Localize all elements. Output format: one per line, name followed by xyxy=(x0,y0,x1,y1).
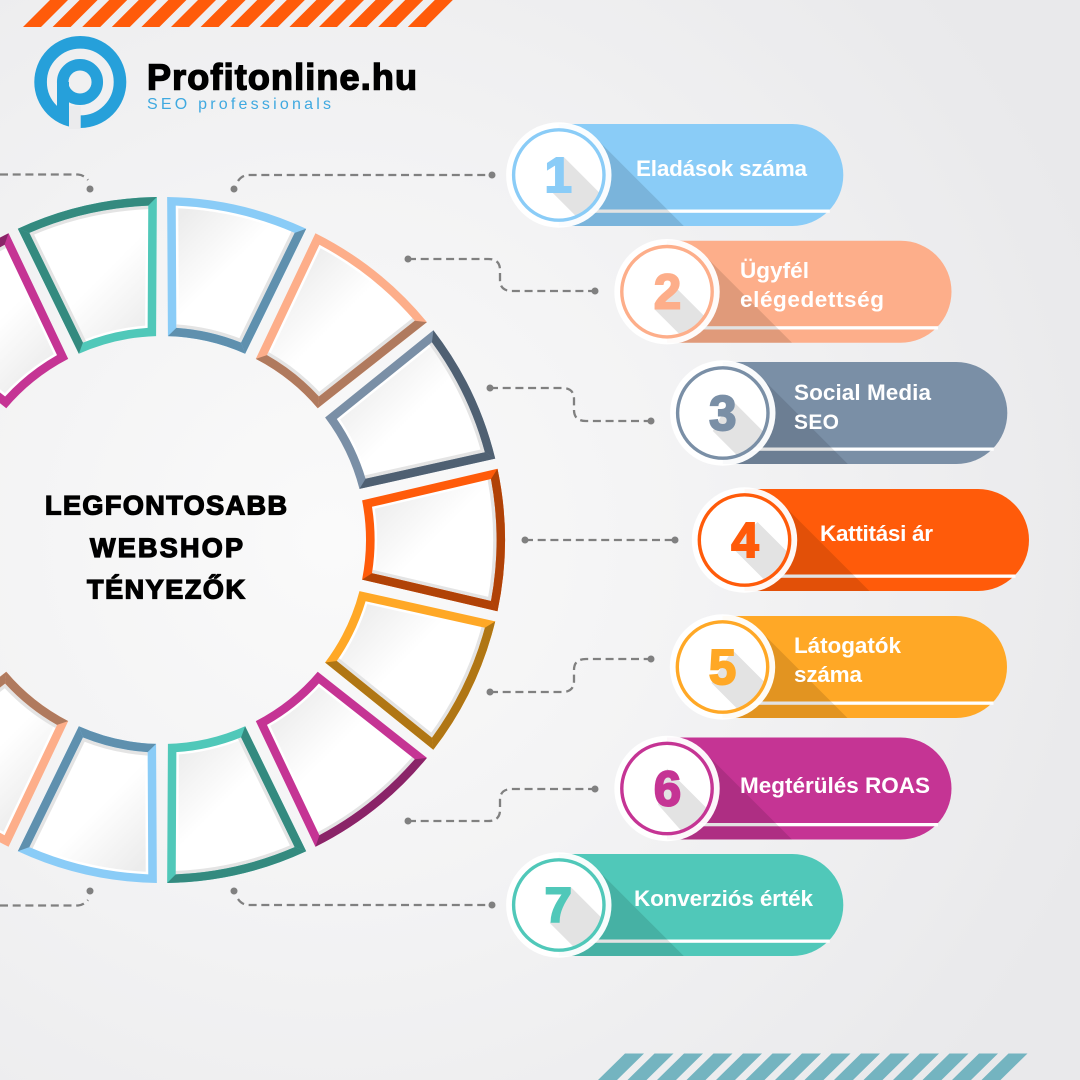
segment 1 blue xyxy=(137,190,308,361)
segmented ring xyxy=(0,190,505,890)
item 2 pill: Ügyfél xyxy=(740,258,809,283)
item 6 pill: Megtérülés ROAS xyxy=(740,773,930,798)
segment 2 peach xyxy=(231,227,432,428)
icon: Profitonline P mark xyxy=(41,42,120,129)
item 4 pill: 4 xyxy=(731,514,759,568)
connector: item 3 xyxy=(486,384,654,424)
segment 5 amber xyxy=(311,563,502,753)
item 6 pill xyxy=(614,736,952,841)
item 3 pill: 3 xyxy=(709,387,736,441)
logo tagline: SEO professionals xyxy=(147,96,331,113)
item 1 pill: 1 xyxy=(545,149,572,203)
connector: item 4 xyxy=(522,536,678,544)
item 4 pill xyxy=(692,488,1029,592)
ring left half xyxy=(0,190,187,890)
segment 3 slate xyxy=(311,327,502,517)
logo wordmark: Profitonline.hu xyxy=(147,56,417,98)
item 3 pill: SEO xyxy=(794,411,839,434)
item 7 pill: Konverziós érték xyxy=(634,886,813,911)
ring right half xyxy=(137,190,505,890)
connector: item 6 xyxy=(404,786,598,824)
connector: item 7 xyxy=(230,888,496,908)
item 5 pill xyxy=(670,614,1007,720)
connector: item 1 xyxy=(230,172,496,192)
title: LEGFONTOSABB xyxy=(45,490,287,520)
connector: bottom left xyxy=(0,888,94,906)
item 2 pill: elégedettség xyxy=(740,287,884,312)
logo xyxy=(41,42,417,129)
bottom teal stripes xyxy=(598,1054,1028,1080)
top orange stripes xyxy=(23,0,453,27)
item 1 pill: Eladások száma xyxy=(636,156,807,181)
title: TÉNYEZŐK xyxy=(87,574,246,604)
item 2 pill: 2 xyxy=(654,266,681,320)
item 7 pill: 7 xyxy=(545,879,572,933)
title: WEBSHOP xyxy=(90,533,243,563)
segment 7 teal xyxy=(137,719,308,890)
title xyxy=(45,490,287,604)
item 4 pill: Kattitási ár xyxy=(820,521,933,546)
item 3 pill xyxy=(670,360,1008,466)
item 7 pill xyxy=(506,852,844,958)
connector: item 2 xyxy=(404,256,598,294)
item 3 pill: Social Media xyxy=(794,380,931,405)
connector: item 5 xyxy=(486,656,654,696)
segment 4 orange xyxy=(362,469,505,611)
segment 6 magenta xyxy=(231,652,432,853)
item 2 pill xyxy=(614,239,952,344)
connector: top left xyxy=(0,174,94,192)
item 1 pill xyxy=(506,122,844,228)
item 5 pill: száma xyxy=(794,662,862,687)
item 6 pill: 6 xyxy=(654,762,681,816)
item 5 pill: 5 xyxy=(709,641,736,695)
item 5 pill: Látogatók xyxy=(794,633,901,658)
